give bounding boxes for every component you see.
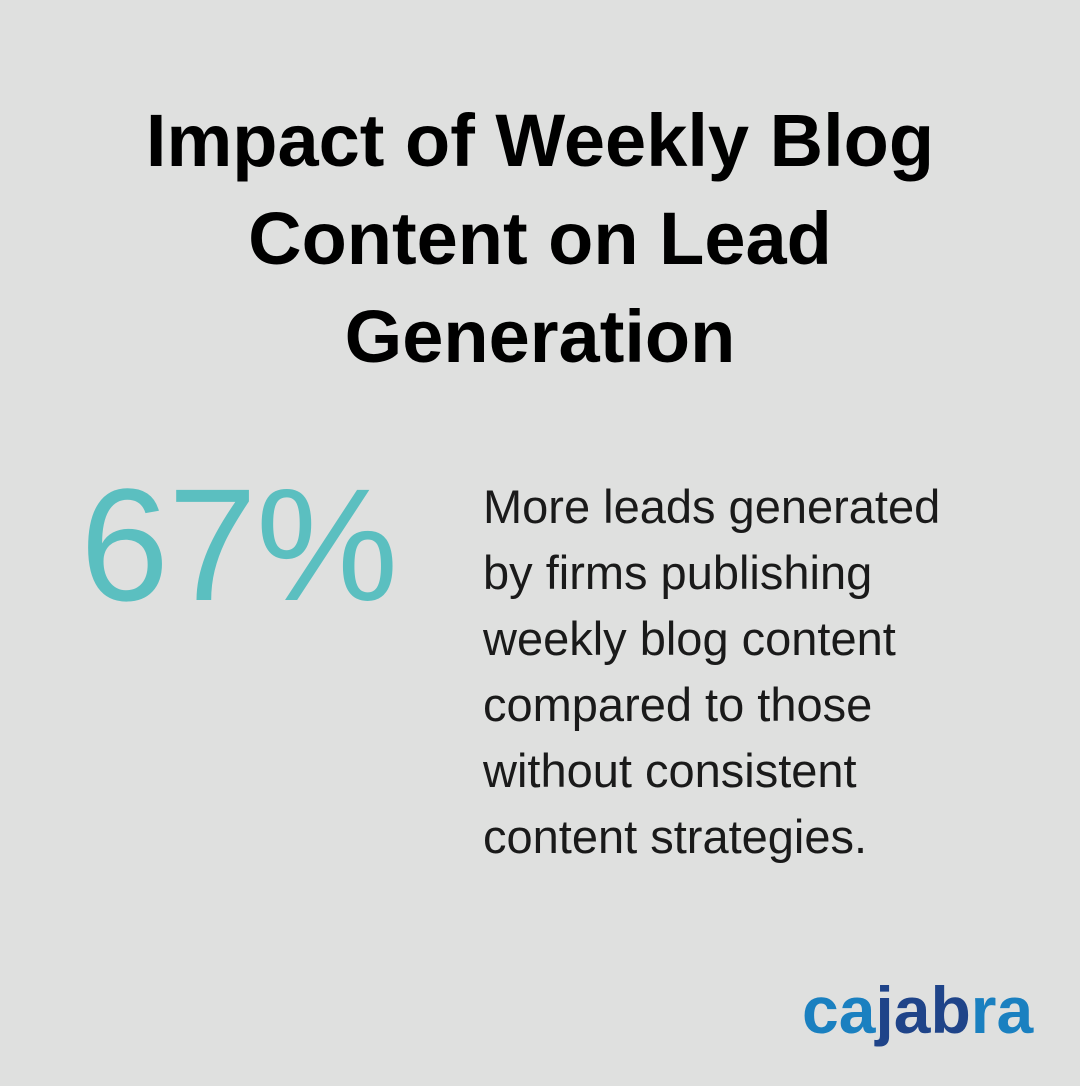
title (146, 99, 934, 378)
stat description: compared to those (483, 678, 872, 731)
logo: cajabra (802, 973, 1033, 1047)
title: Generation (345, 295, 735, 378)
stat description: weekly blog content (483, 612, 896, 665)
stat description: by firms publishing (483, 546, 872, 599)
stat number: 67% (80, 455, 397, 634)
title: Content on Lead (248, 197, 832, 280)
stat description (483, 480, 940, 863)
stat description: More leads generated (483, 480, 940, 533)
stat description: content strategies. (483, 810, 867, 863)
title: Impact of Weekly Blog (146, 99, 934, 182)
stat description: without consistent (483, 744, 857, 797)
